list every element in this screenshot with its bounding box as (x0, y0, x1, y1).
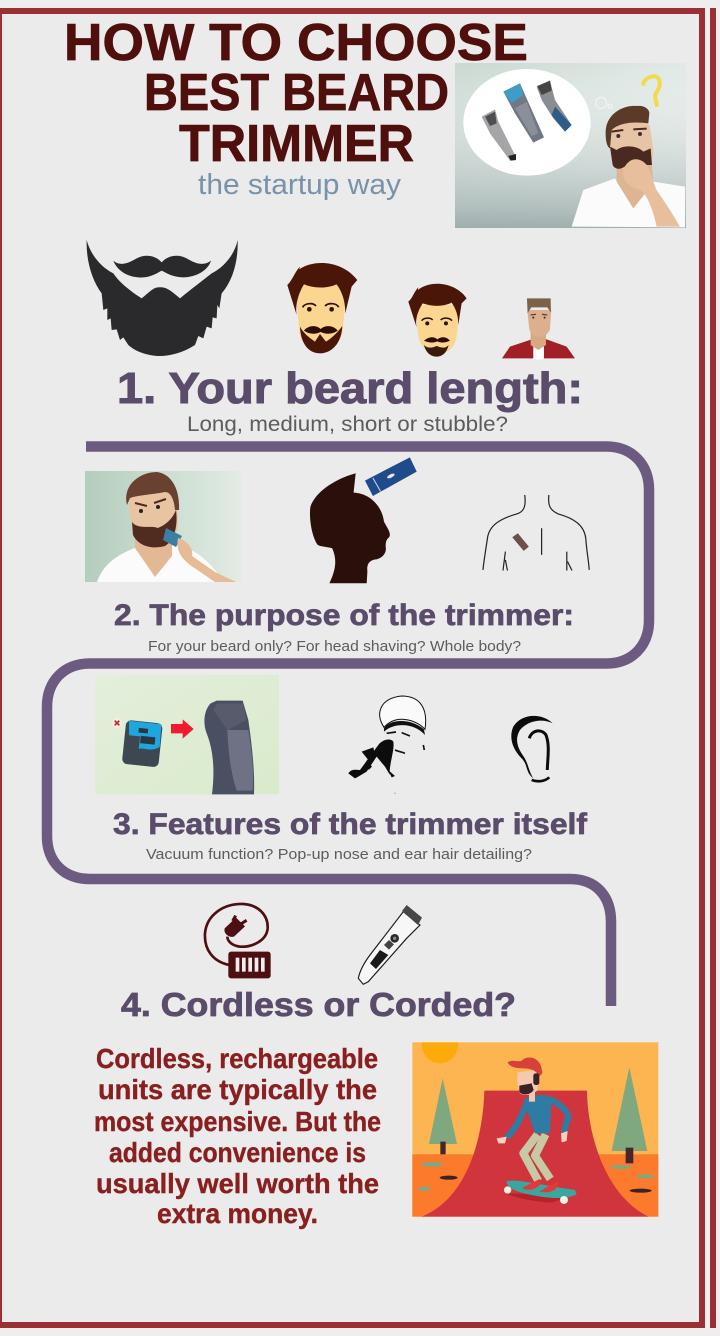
connector path (47, 446, 649, 1006)
icon: large beard silhouette (87, 240, 238, 356)
subtext 3: Vacuum function? Pop-up nose and ear hair detailing? (146, 846, 532, 863)
icon: ear outline (511, 716, 553, 781)
thought bubble with trimmers (463, 69, 591, 176)
icon: short beard face (408, 284, 467, 357)
icon: torso outline with trimmer (483, 495, 589, 571)
subtext 1: Long, medium, short or stubble? (187, 413, 508, 436)
heading 3: 3. Features of the trimmer itself (113, 808, 588, 841)
subtext 2: For your beard only? For head shaving? Whole body? (148, 638, 521, 655)
body text: cordless advice: usually well worth the (96, 1168, 379, 1199)
illustration: skateboarder on ramp (412, 1042, 658, 1217)
icon: corded plug and battery (205, 904, 271, 978)
small thought circles (596, 98, 612, 108)
icon: head silhouette with blue clipper (310, 457, 417, 583)
icon: man trimming nose hair (348, 696, 426, 794)
title: HOW TO CHOOSE (64, 14, 528, 72)
body text: cordless advice: extra money. (157, 1198, 318, 1229)
heading 4: 4. Cordless or Corded? (121, 986, 516, 1023)
subtitle: the startup way (198, 169, 402, 201)
body text: cordless advice: units are typically the (98, 1074, 377, 1105)
man figure (572, 106, 685, 227)
illustration: man trimming beard (85, 471, 241, 582)
illustration: vacuum trimmer comparison (95, 675, 279, 794)
heading 2: 2. The purpose of the trimmer: (114, 599, 574, 632)
icon: stubble man (502, 298, 575, 359)
body text: cordless advice (94, 1043, 381, 1229)
title: TRIMMER (179, 115, 414, 173)
icon: medium beard face (287, 263, 357, 353)
yellow question mark (643, 76, 660, 105)
icon: cordless trimmer (358, 905, 422, 984)
body text: cordless advice: added convenience is (109, 1137, 366, 1168)
illustration: man thinking about trimmers (455, 63, 686, 228)
title: BEST BEARD (144, 64, 449, 122)
title (64, 14, 528, 173)
body text: cordless advice: Cordless, rechargeable (96, 1043, 378, 1074)
heading 1: 1. Your beard length: (117, 364, 583, 413)
body text: cordless advice: most expensive. But the (94, 1106, 381, 1137)
